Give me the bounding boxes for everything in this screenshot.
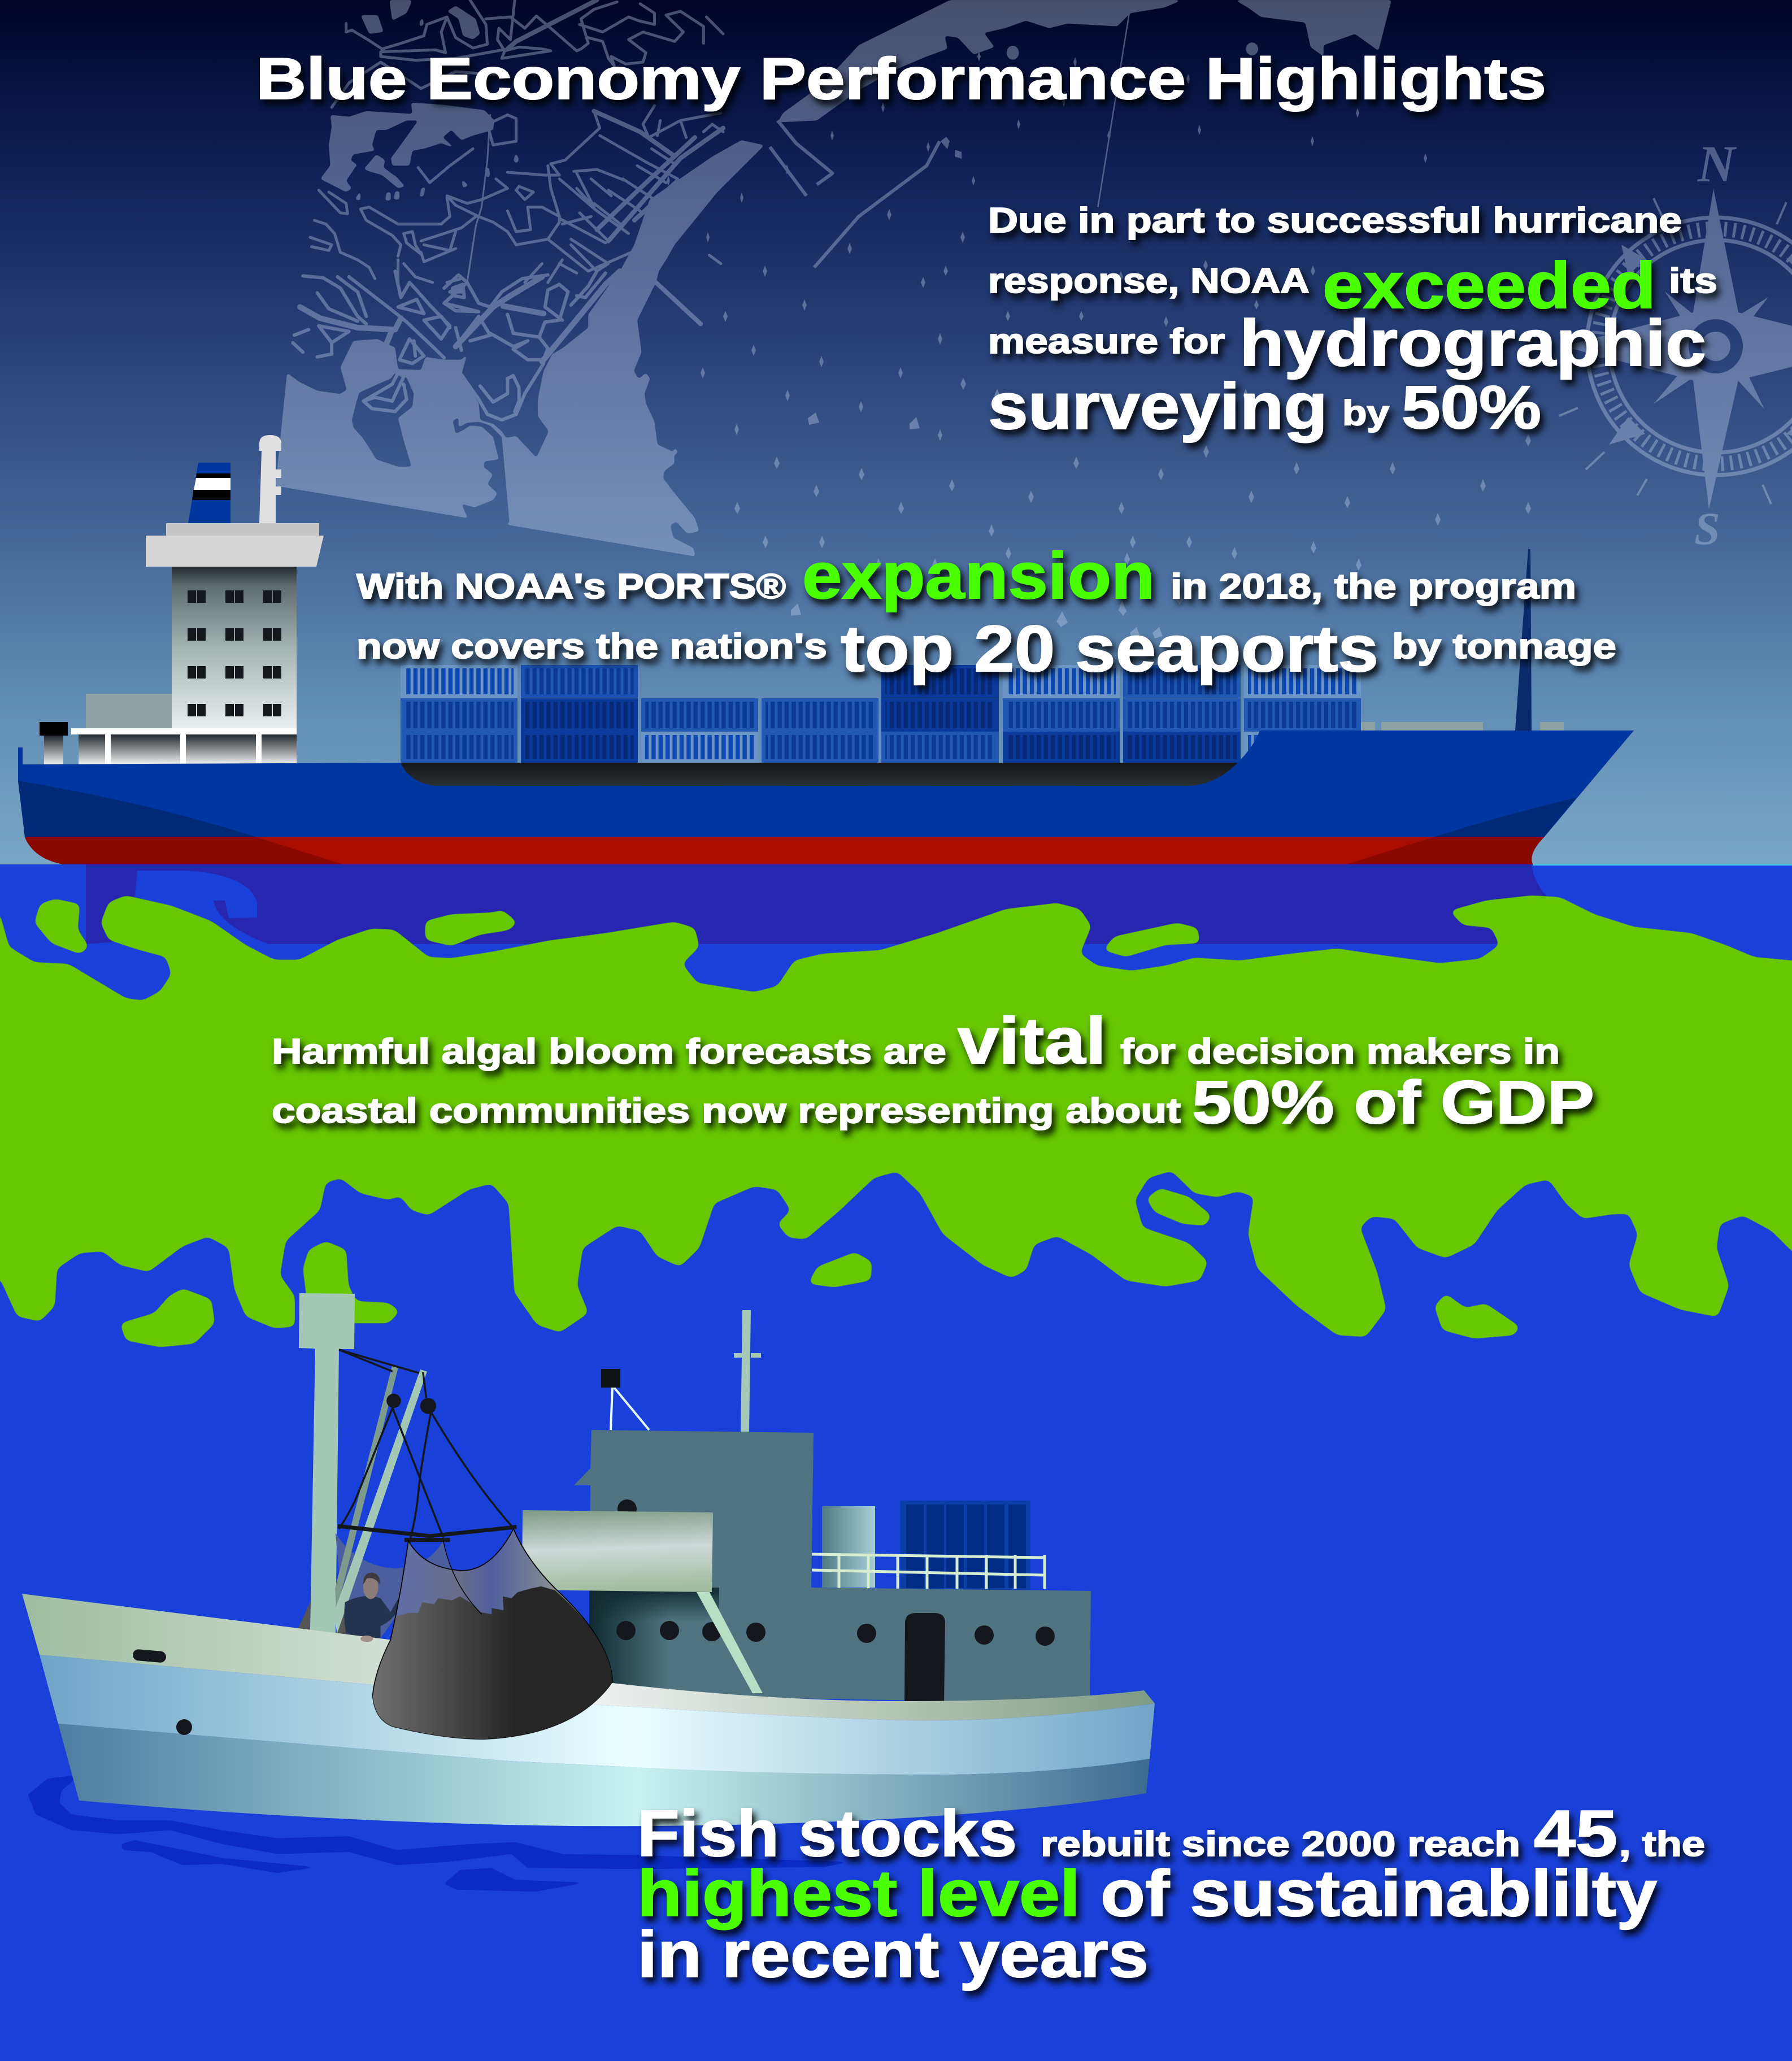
cabin <box>574 1430 1091 1703</box>
container ship <box>18 435 1792 866</box>
bridge deck <box>166 523 319 536</box>
water ripples <box>28 1776 851 1892</box>
text block: PORTS expansion: now covers the nation's <box>356 627 827 666</box>
text block: hydrographic surveying: 50% <box>1402 373 1541 441</box>
algal bloom <box>0 895 1792 1347</box>
tower windows <box>188 590 281 716</box>
bow shadow <box>1433 798 1576 837</box>
text block: harmful algal bloom forecasts: coastal communities now representing about <box>272 1092 1181 1130</box>
coastal marsh islands <box>320 0 519 201</box>
hold trough <box>401 763 1238 786</box>
text block: hydrographic surveying: exceeded <box>1323 249 1656 322</box>
funnel <box>188 463 230 523</box>
text block: harmful algal bloom forecasts: 50% of GDP <box>1192 1068 1594 1136</box>
antenna lines <box>611 1388 649 1430</box>
lower deckhouse <box>79 734 297 765</box>
red boot stripe <box>25 837 1544 864</box>
waterline <box>1533 864 1792 866</box>
hull upper band <box>22 1594 1155 1720</box>
translucent net <box>373 1529 612 1739</box>
aft deck box <box>86 694 172 728</box>
compass hub <box>1701 332 1730 361</box>
boom left <box>335 1364 398 1612</box>
net bag <box>360 1529 612 1739</box>
text block: hydrographic surveying: surveying <box>988 369 1328 443</box>
text block: PORTS expansion: by tonnage <box>1392 627 1616 666</box>
accommodation tower <box>172 567 297 728</box>
text block: harmful algal bloom forecasts <box>272 1004 1594 1136</box>
text block: hydrographic surveying: measure for <box>988 322 1225 361</box>
container stacks <box>401 665 1361 763</box>
fisherman hand on rail <box>360 1636 373 1642</box>
deck box <box>522 1510 713 1592</box>
rigging and net <box>297 1350 516 1640</box>
cargo box slats <box>906 1505 1026 1588</box>
compass diagonal points <box>1609 245 1792 445</box>
fore mast <box>734 1310 761 1432</box>
northern land <box>778 0 1391 123</box>
aft vent <box>40 722 68 736</box>
bridge <box>146 536 324 567</box>
radar mast <box>259 435 281 523</box>
cabin door <box>904 1613 945 1703</box>
compass rose: N <box>1697 135 1737 193</box>
text block: harmful algal bloom forecasts: Harmful algal bloom forecasts are <box>272 1032 946 1071</box>
white deck rail and posts <box>71 728 297 765</box>
nautical chart map <box>276 0 1792 638</box>
hull slot <box>132 1649 167 1663</box>
text block: PORTS expansion: in 2018, the program <box>1171 567 1576 606</box>
text block: fish stocks: highest level <box>637 1856 1080 1930</box>
compass star <box>1563 189 1792 509</box>
compass outer rays <box>1559 198 1786 504</box>
text block: PORTS expansion: top 20 seaports <box>841 612 1378 685</box>
strut <box>697 1592 763 1693</box>
fisherman <box>344 1572 407 1640</box>
foredeck fittings <box>1361 722 1564 731</box>
main bloom <box>0 895 1792 1337</box>
hull middle band <box>40 1655 1155 1775</box>
text block: harmful algal bloom forecasts: vital <box>958 1004 1106 1077</box>
coastal road network north <box>310 0 723 282</box>
depth soundings <box>667 46 1531 638</box>
text block: fish stocks: in recent years <box>637 1917 1149 1991</box>
text block: fish stocks: rebuilt since 2000 reach <box>1041 1825 1520 1864</box>
railing <box>812 1554 1046 1589</box>
fishing boat <box>22 1293 1155 1826</box>
text block: fish stocks: 45 <box>1534 1797 1617 1870</box>
stern shadow <box>18 781 257 837</box>
boom right <box>334 1369 427 1634</box>
hull porthole <box>176 1719 192 1735</box>
back net <box>336 1533 482 1638</box>
portholes <box>616 1499 1055 1646</box>
compass rose <box>1559 135 1792 554</box>
text block: hydrographic surveying: response, NOAA <box>988 262 1310 301</box>
text block: PORTS expansion: With NOAA's PORTS® <box>356 567 786 606</box>
cabin shadow side <box>589 1588 668 1689</box>
sky background <box>0 0 1792 866</box>
bloom islands <box>34 899 1520 1347</box>
text block: harmful algal bloom forecasts: for decision makers in <box>1120 1032 1560 1071</box>
title: Blue Economy Performance Highlights <box>256 46 1546 112</box>
text block: hydrographic surveying: Due in part to successful hurricane <box>988 201 1682 240</box>
aft vent stem <box>44 736 63 765</box>
stern red shade <box>25 837 343 864</box>
bow mast <box>1515 549 1532 731</box>
text block: hydrographic surveying: hydrographic <box>1239 306 1706 380</box>
net seams <box>373 1541 482 1695</box>
hull lower band <box>58 1724 1150 1826</box>
stays <box>339 1350 419 1373</box>
text block: fish stocks: of sustainablilty <box>1101 1856 1657 1930</box>
hull <box>18 731 1634 864</box>
fish catch <box>373 1586 612 1739</box>
text block: fish stocks <box>637 1797 1705 1991</box>
text block: PORTS expansion <box>356 539 1616 685</box>
blue cargo box <box>900 1501 1030 1590</box>
text block: fish stocks: Fish stocks <box>637 1797 1017 1870</box>
compass rose: S <box>1694 503 1720 554</box>
channels and offshore lines <box>770 13 1129 267</box>
compass rings <box>1587 218 1792 475</box>
main southern land and strip <box>276 140 764 556</box>
land masses <box>276 0 1391 556</box>
funnel <box>822 1506 875 1588</box>
grey lines of net behind mast <box>297 1602 347 1634</box>
text block: hydrographic surveying: by <box>1342 394 1390 433</box>
cabin shadow top <box>589 1588 719 1621</box>
spreader bars <box>338 1526 516 1540</box>
lift lines <box>339 1372 514 1543</box>
antenna box <box>601 1369 620 1388</box>
bow red shade <box>1346 837 1544 864</box>
main mast <box>299 1293 355 1634</box>
text block: PORTS expansion: expansion <box>802 539 1155 612</box>
text block: fish stocks: , the <box>1619 1825 1705 1864</box>
text block: hydrographic surveying <box>988 201 1717 443</box>
text block: hydrographic surveying: its <box>1669 262 1717 301</box>
water background <box>0 864 1792 2061</box>
coastal road network south <box>293 271 701 420</box>
pulleys <box>386 1394 436 1414</box>
compass ticks <box>1598 229 1792 464</box>
ship reflection in water <box>86 864 1596 977</box>
